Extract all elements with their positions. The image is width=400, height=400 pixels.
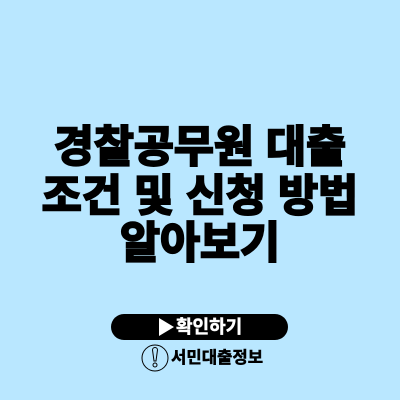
button: confirm [111,314,288,340]
brand name: 서민대출정보 [171,348,263,367]
title [42,124,358,268]
button label: 확인하기 [176,317,242,337]
title: 경찰공무원 대출 [54,124,346,172]
brand: logo and name [142,344,263,372]
title: 조건 및 신청 방법 [42,173,358,221]
icon: exclamation circle [142,344,168,372]
icon: play triangle [159,318,174,336]
title: 알아보기 [120,220,280,268]
